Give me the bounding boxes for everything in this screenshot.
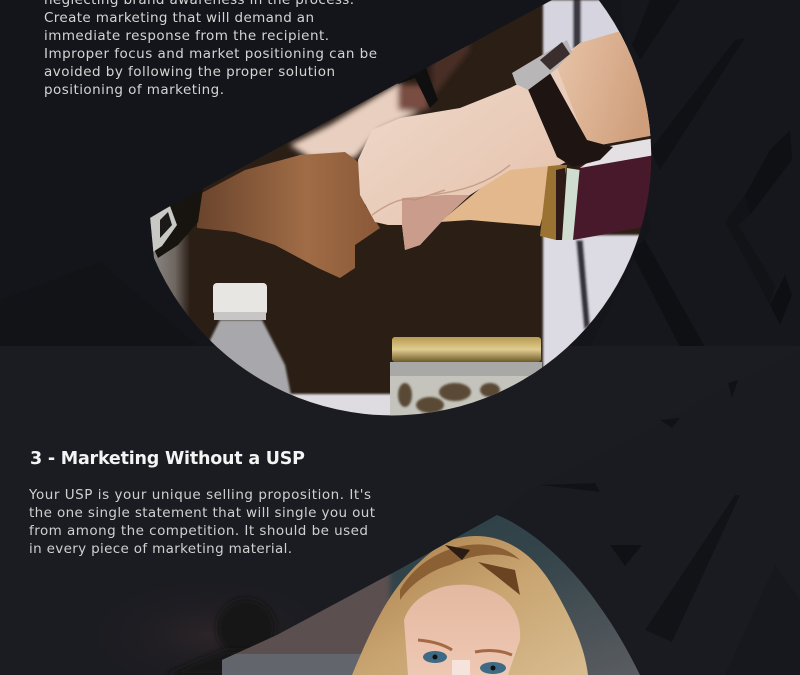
maroon sleeve (573, 152, 655, 240)
text block: USP paragraph: from among the competition. It should be used (29, 523, 368, 539)
photo backdrop (150, 0, 650, 394)
eyes (423, 651, 447, 663)
background smartwatch (398, 68, 438, 108)
knuckle creases (372, 165, 510, 215)
blurred grey wall at left (152, 235, 188, 316)
background hand (290, 35, 470, 158)
photo backdrop (220, 510, 650, 675)
glass jar (390, 337, 542, 422)
text block: USP paragraph: Your USP is your unique selling proposition. It's (28, 487, 371, 503)
text block: USP paragraph (28, 487, 375, 557)
second wrist (442, 166, 548, 226)
photo: blonde woman (220, 510, 650, 675)
text block: positioning paragraph: immediate response from the recipient. (44, 28, 329, 44)
text block: positioning paragraph (44, 0, 377, 98)
wristwatch (512, 40, 613, 167)
eyebrows (418, 640, 512, 655)
text block: USP paragraph: in every piece of marketing material. (29, 541, 292, 557)
white fist and forearm (358, 32, 655, 250)
heading: 3 - Marketing Without a USP: 3 - Marketing Without a USP (30, 449, 305, 469)
lower panel geometric pattern (497, 350, 800, 675)
nose (452, 660, 470, 675)
text block: positioning paragraph: avoided by following the proper solution (44, 64, 335, 80)
lower panel background (0, 346, 800, 675)
brown fist (197, 152, 380, 278)
text block: USP paragraph: the one single statement that will single you out (29, 505, 375, 521)
top panel background (0, 0, 800, 347)
silhouette head (217, 599, 275, 657)
hair (352, 536, 588, 675)
text block: positioning paragraph: positioning of marketing. (44, 82, 224, 98)
white cuff (580, 138, 655, 168)
gold watch and white band (540, 165, 580, 240)
faded background photo (80, 575, 340, 675)
lower fingers (402, 195, 470, 250)
photo: team fist bump (120, 0, 660, 424)
face (404, 585, 520, 675)
blurred light wall strip, upper and lower (280, 0, 653, 424)
text block: positioning paragraph: Improper focus and market positioning can be (44, 46, 377, 62)
text block: positioning paragraph: Create marketing that will demand an (44, 10, 314, 26)
bead bracelet (150, 188, 203, 258)
plastic bottle (205, 283, 292, 400)
